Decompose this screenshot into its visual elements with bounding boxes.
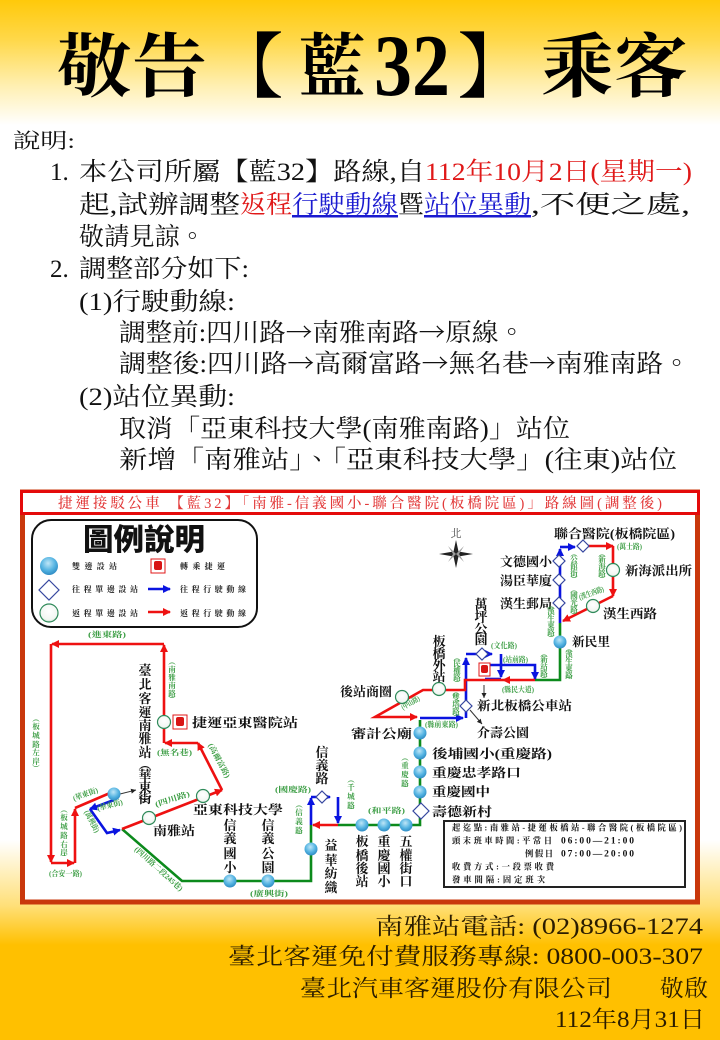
stop names: 壽德新村 xyxy=(432,804,493,819)
route after adjustment: 調整後:四川路 →高爾富路 →無名巷→南雅南路。 xyxy=(119,344,690,380)
stop names: 捷運亞東醫院站 xyxy=(192,715,299,730)
pointer arrows xyxy=(120,685,484,794)
road labels: (文化路) xyxy=(491,640,517,650)
road labels: (華東街) xyxy=(71,784,100,803)
road labels: (合安一路) xyxy=(49,868,82,878)
title: 32 xyxy=(374,18,450,115)
stop names: 板橋外站 xyxy=(432,634,446,684)
road labels: (縣民大道) xyxy=(502,684,534,694)
sub-heading 1: (1)行駛動線: xyxy=(79,288,235,316)
map frame xyxy=(22,492,698,902)
stop names: 湯臣華廈 xyxy=(500,573,553,588)
road labels: (漢生西路) xyxy=(577,583,605,602)
legend: return stop xyxy=(40,604,138,622)
return red segments xyxy=(51,546,613,863)
company name: 臺北汽車客運股份有限公司 xyxy=(300,976,612,1001)
stop names: 後埔國小(重慶路) xyxy=(432,746,552,761)
fare: 收費方式:一段票收費 xyxy=(452,862,556,872)
title: 藍 xyxy=(298,30,366,107)
panel: route map xyxy=(22,492,698,902)
cancelled stop: 取消「亞東科技大學(南雅南路)」站位 xyxy=(119,415,570,443)
date: 112年8月31日 xyxy=(555,1007,705,1032)
road labels: ︵國光路︶ xyxy=(570,585,578,620)
legend: return line xyxy=(148,608,246,618)
holiday hours: 例假日 xyxy=(525,848,553,858)
holiday hours: 07:00—20:00 xyxy=(561,850,634,860)
road labels: (萬士路) xyxy=(617,541,642,551)
item 1 line 2: 站位異動 xyxy=(424,191,531,219)
stop names: 新北板橋公車站 xyxy=(477,698,573,713)
stop names: 萬坪公園 xyxy=(474,597,488,647)
weekday hours: 頭末班車時間:平常日 xyxy=(452,836,552,846)
item 1 line 1: 112年10月2日(星期一) xyxy=(425,158,692,186)
title: 乘客 xyxy=(540,30,688,107)
road labels: ︵新海路︶ xyxy=(598,549,606,584)
road labels: ︵新站路︶ xyxy=(540,649,548,684)
stop names: 審計公廟 xyxy=(351,726,413,741)
title xyxy=(57,18,688,115)
stop names: 板橋後站 xyxy=(355,834,369,889)
legend: outbound stop xyxy=(39,580,138,600)
road labels: (廣興街) xyxy=(250,888,289,898)
item 1 line 3: 敬請見諒。 xyxy=(79,223,205,251)
service endpoints: 起迄點:南雅站-捷運板橋站-聯合醫院(板橋院區) xyxy=(452,822,682,832)
stop names xyxy=(138,526,693,895)
stop names: 重慶國小 xyxy=(377,834,391,889)
outbound stops xyxy=(316,540,589,819)
info box: service details xyxy=(444,821,685,887)
stop names: 臺北客運南雅站︵華東街︶ xyxy=(138,663,152,810)
road labels xyxy=(32,541,642,898)
item 1 line 1: 1. xyxy=(50,159,69,186)
road labels: ︵重慶路︶ xyxy=(401,753,409,793)
compass xyxy=(439,527,473,568)
item 1 line 2: 返程 xyxy=(240,191,292,219)
stop names: 信義公園 xyxy=(261,818,275,875)
route lines xyxy=(51,546,613,881)
legend: return stop: 返程單邊設站 xyxy=(72,608,138,618)
item 1 line 1: 本公司所屬【藍32】路線,自 xyxy=(79,158,425,186)
stop names: 五權街口 xyxy=(399,834,413,889)
road labels: ︵民權路︶ xyxy=(453,653,461,688)
return stops xyxy=(142,564,620,824)
title: 敬告 xyxy=(57,30,207,107)
stop names: 信義國小 xyxy=(223,818,237,875)
item 1 line 2: 起,試辦調整 xyxy=(79,191,240,219)
notice body text xyxy=(13,129,692,474)
title: 【 xyxy=(213,30,283,107)
stop names: 聯合醫院(板橋院區) xyxy=(554,526,675,541)
item 1 line 2: ,不便之處, xyxy=(531,191,690,219)
map title bar xyxy=(22,492,698,514)
road labels: ︵漢生東路︶ xyxy=(547,601,555,643)
item 2: 調整部分如下: xyxy=(79,255,249,283)
sign-off: 敬啟 xyxy=(660,976,708,1001)
compass: 北 xyxy=(450,527,462,540)
legend: MRT transfer xyxy=(151,559,225,573)
stop names: 新民里 xyxy=(572,634,610,649)
stop names: 文德國小 xyxy=(500,554,554,569)
two-way stops xyxy=(108,636,566,888)
icon: MRT stations xyxy=(173,663,490,729)
road labels: (四川路二段245巷) xyxy=(133,844,186,893)
new stops: 新增「南雅站」、「亞東科技大學」(往東)站位 xyxy=(119,446,677,474)
stop names: 後站商圈 xyxy=(340,684,392,699)
route before adjustment: 調整前:四川路 →南雅南路 →原線。 xyxy=(119,313,525,349)
road labels: ︵信義路︶ xyxy=(295,800,303,840)
road labels: (無名巷) xyxy=(157,747,193,757)
stop names: 信義路 xyxy=(315,745,329,786)
legend heading: 圖例說明 xyxy=(83,524,205,557)
legend: two-way stop xyxy=(40,557,117,575)
stop names: 重慶國中 xyxy=(432,784,490,799)
two-way green segments xyxy=(122,623,560,881)
legend: outbound line: 往程行駛動線 xyxy=(180,584,246,594)
stop names: 漢生郵局 xyxy=(500,596,552,611)
item 2: 2. xyxy=(50,256,69,283)
stop names: 重慶忠孝路口 xyxy=(432,765,521,780)
road labels: ︵板城路左岸︶ xyxy=(32,714,40,773)
heading: 說明: 說明: xyxy=(13,129,75,153)
stop names: 介壽公園 xyxy=(477,725,529,740)
sub-heading 2: (2)站位異動: xyxy=(79,383,235,411)
legend: outbound line xyxy=(148,584,246,594)
road labels: (萬興街) xyxy=(82,808,103,835)
stop names: 南雅站 xyxy=(153,823,196,838)
road labels: ︵公館街︶ xyxy=(570,549,578,584)
outbound blue segments xyxy=(90,547,575,833)
road labels: ︵板城路右岸︶ xyxy=(60,805,68,862)
map title bar: 捷運接駁公車 【藍32】「南雅-信義國小-聯合醫院(板橋院區)」路線圖(調整後) xyxy=(58,494,662,512)
legend: return line: 返程行駛動線 xyxy=(180,608,246,618)
road labels: ︵南雅南路︶ xyxy=(168,657,176,704)
legend xyxy=(32,520,257,627)
road labels: (站前路) xyxy=(503,654,528,664)
road labels: (高爾富路) xyxy=(206,741,233,780)
item 1 line 2: 暨 xyxy=(398,191,424,219)
road labels: (國慶路) xyxy=(275,784,312,794)
road labels: (華東街) xyxy=(96,796,124,813)
title: 】 xyxy=(458,30,528,107)
road labels: (中山路) xyxy=(399,693,422,712)
legend: outbound stop: 往程單邊設站 xyxy=(72,584,138,594)
road labels: ︵雙塔路︶ xyxy=(452,687,460,722)
toll-free line: 臺北客運免付費服務專線: 0800-003-307 xyxy=(228,944,703,969)
road labels: ︵漢生東路︶ xyxy=(565,644,573,684)
stop names: 益華紡織 xyxy=(324,838,338,895)
footer contact block xyxy=(228,914,708,1032)
item 1 line 2: 行駛動線 xyxy=(292,191,398,219)
weekday hours: 06:00—21:00 xyxy=(561,836,634,846)
stop names: 漢生西路 xyxy=(603,606,658,621)
road labels: (四川路) xyxy=(154,788,191,809)
stop names: 新海派出所 xyxy=(625,563,693,578)
road labels: ︵千城路︶ xyxy=(347,775,355,815)
legend: MRT transfer: 轉乘捷運 xyxy=(180,561,225,571)
stops xyxy=(108,540,620,888)
road labels: (縣前東路) xyxy=(425,719,458,729)
road labels: (和平路) xyxy=(368,805,406,815)
stop names: 亞東科技大學 xyxy=(193,802,284,817)
Nanya station phone: 南雅站電話: (02)8966-1274 xyxy=(375,914,704,939)
legend: two-way stop: 雙邊設站 xyxy=(72,561,117,571)
road labels: (進東路) xyxy=(88,629,127,639)
headway: 發車間隔:固定班次 xyxy=(452,874,546,884)
